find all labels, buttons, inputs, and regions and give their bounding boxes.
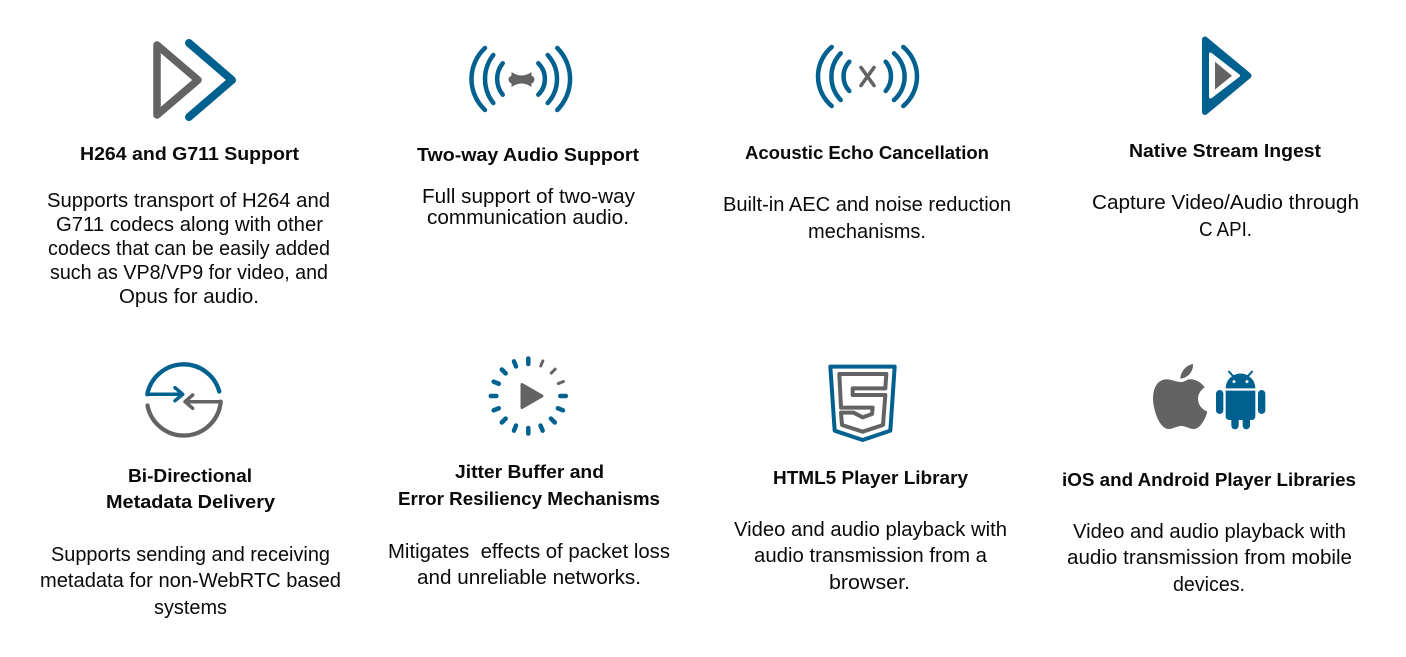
text: mobile libraries description: devices. [1173,574,1245,596]
panel: HTML5 Player Library [734,367,1007,594]
icon: double play chevron [157,43,232,117]
text: echo cancellation description: mechanisms. [808,221,926,243]
heading: iOS and Android Player Libraries: iOS and Android Player Libraries [1062,469,1356,490]
icon: HTML5 shield [830,367,895,440]
panel: Acoustic Echo Cancellation [723,47,1011,243]
panel: Jitter Buffer and Error Resiliency Mechanisms [388,358,670,589]
text: H264 description: Supports transport of H264 and [47,190,330,212]
text: HTML5 description: audio transmission from a [754,545,988,567]
text: HTML5 description [734,519,1007,594]
heading: HTML5 Player Library: HTML5 Player Library [773,467,969,488]
icon: two-way audio waves [471,48,570,110]
text: jitter buffer description [388,541,670,589]
text: H264 description: such as VP8/VP9 for video, and [50,262,328,284]
text: metadata description: Supports sending and receiving [51,544,330,566]
text: jitter buffer description: Mitigates effects of packet loss [388,541,670,563]
panel: Bi-Directional Metadata Delivery [40,364,341,619]
text: metadata description: metadata for non-WebRTC based [40,570,341,592]
text: stream ingest description: Capture Video/Audio through [1092,192,1359,214]
text: two-way audio description [422,186,635,229]
text: HTML5 description: Video and audio playback with [734,519,1007,541]
heading: Bi-Directional Metadata Delivery: Metadata Delivery [106,491,276,512]
icon: echo cancel waves [818,47,917,106]
heading: Bi-Directional Metadata Delivery: Bi-Directional [128,465,252,486]
icon: bi-directional arrows circle [147,364,221,436]
text: mobile libraries description [1067,521,1352,596]
text: stream ingest description [1092,192,1359,241]
panel: Native Stream Ingest [1092,40,1359,241]
heading: Jitter Buffer and Error Resiliency Mechanisms: Jitter Buffer and [455,461,604,482]
heading: Bi-Directional Metadata Delivery [106,465,276,512]
heading: Native Stream Ingest: Native Stream Ingest [1129,140,1321,161]
text: H264 description: codecs that can be easily added [48,238,330,260]
text: jitter buffer description: and unreliable networks. [417,567,641,589]
heading: Two-way Audio Support: Two-way Audio Support [417,144,639,165]
text: H264 description: Opus for audio. [119,286,259,308]
heading: H264 and G711 Support: H264 and G711 Support [80,143,299,164]
panel: Two-way Audio Support [417,48,639,229]
text: echo cancellation description [723,194,1011,243]
text: HTML5 description: browser. [829,572,910,594]
text: mobile libraries description: Video and audio playback with [1073,521,1346,543]
icon: play triangle [1205,40,1248,112]
heading: Jitter Buffer and Error Resiliency Mechanisms [398,461,660,509]
text: two-way audio description: communication audio. [427,207,629,229]
text: mobile libraries description: audio transmission from mobile [1067,547,1352,569]
heading: Jitter Buffer and Error Resiliency Mechanisms: Error Resiliency Mechanisms [398,488,660,509]
heading: Acoustic Echo Cancellation: Acoustic Echo Cancellation [745,142,989,163]
text: stream ingest description: C API. [1199,219,1252,241]
text: H264 description [47,190,330,308]
panel: H264 and G711 Support [47,43,330,308]
text: echo cancellation description: Built-in AEC and noise reduction [723,194,1011,216]
icon: loading ring with play [491,358,566,434]
text: metadata description [40,544,341,619]
icon: Apple and Android logos [1153,364,1265,429]
panel: iOS and Android Player Libraries [1062,364,1356,596]
text: H264 description: G711 codecs along with other [56,214,323,236]
text: metadata description: systems [154,597,227,619]
text: two-way audio description: Full support of two-way [422,186,635,208]
